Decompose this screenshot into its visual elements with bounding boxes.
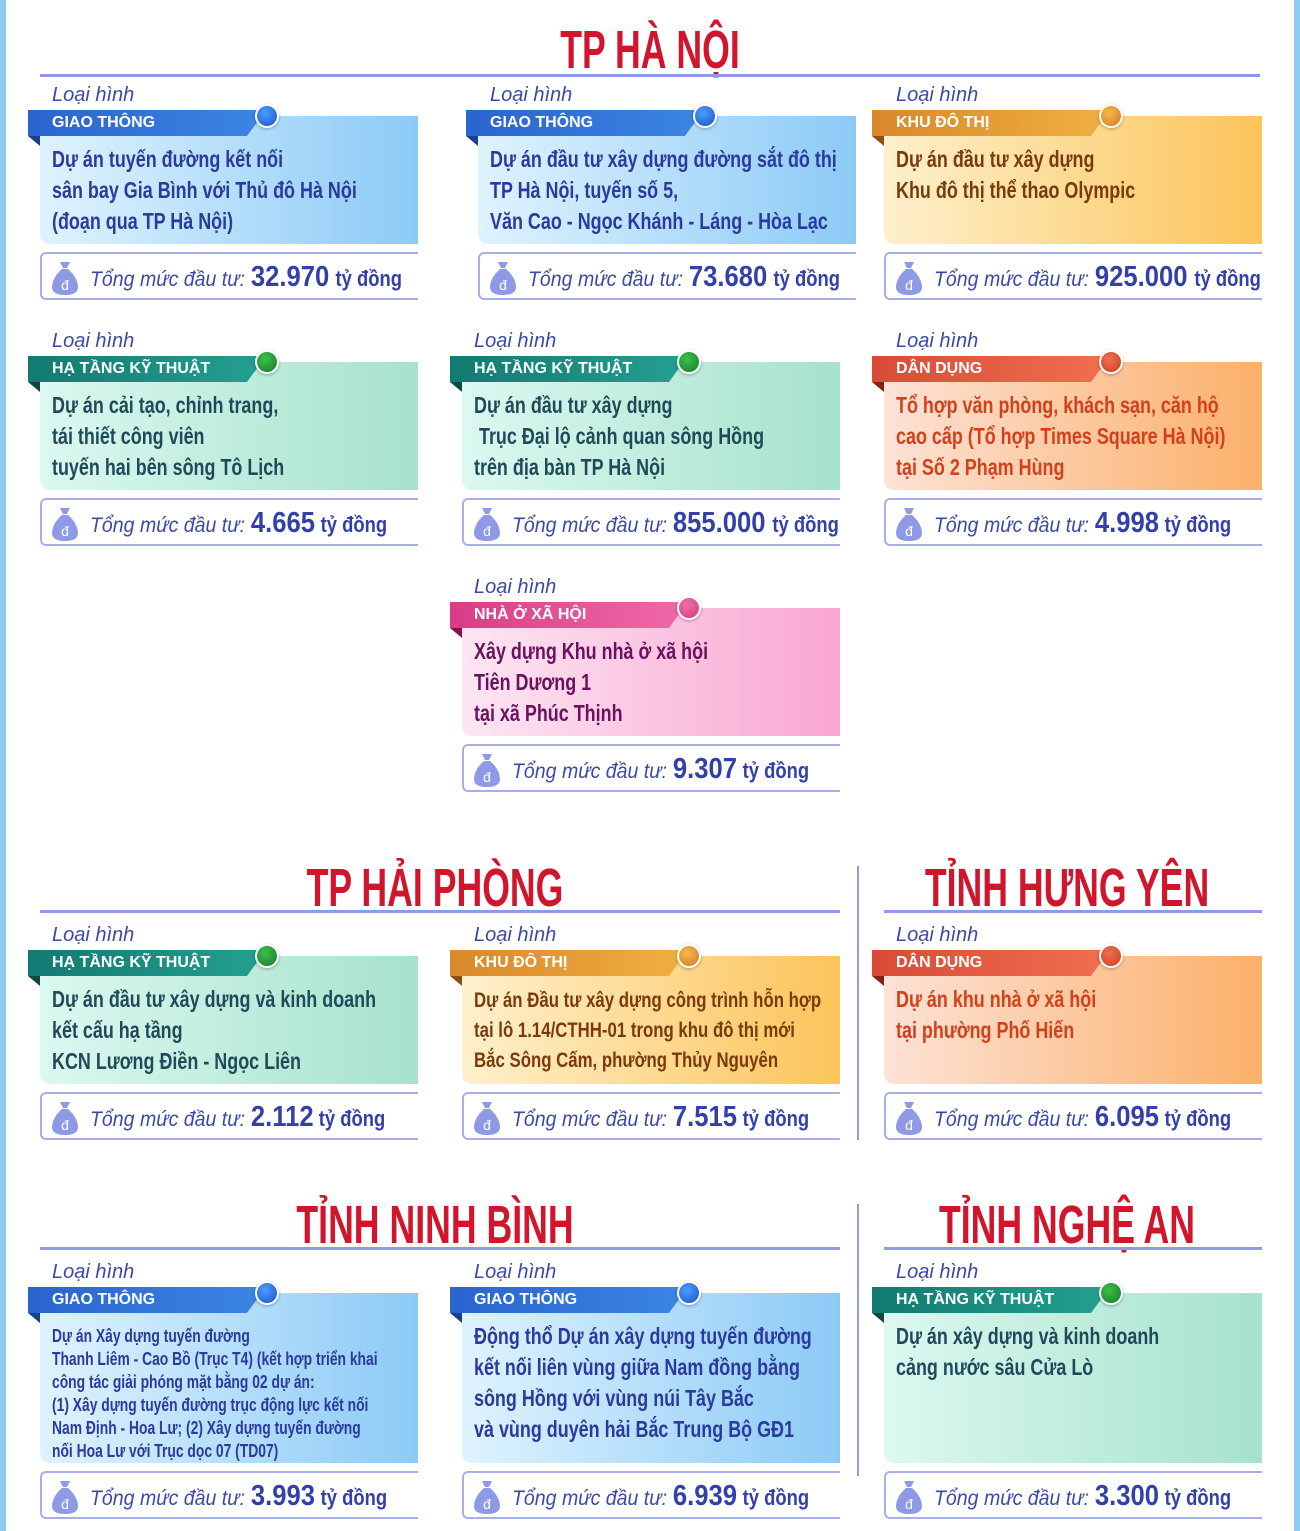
card: Hưng Yên dân dụng: 6.095 bbox=[1094, 1101, 1159, 1133]
card: Ninh Bình giao thông 1: GIAO THÔNG bbox=[52, 1291, 155, 1308]
card: Hà Nội giao thông 2: 73.680 bbox=[688, 261, 767, 293]
card: Hà Nội nhà ở xã hội bbox=[450, 576, 840, 792]
card: Hà Nội nhà ở xã hội: 9.307 bbox=[672, 753, 737, 785]
card: Hải Phòng khu đô thị: Loại hình bbox=[474, 924, 556, 946]
card: Hải Phòng hạ tầng: KCN Lương Điền - Ngọc Liên bbox=[52, 1048, 301, 1074]
card: Ninh Bình giao thông 2: Động thổ Dự án xây dựng tuyến đường bbox=[474, 1323, 812, 1349]
card: Hà Nội giao thông 2: Văn Cao - Ngọc Khánh - Láng - Hòa Lạc bbox=[490, 208, 828, 234]
card: Hà Nội hạ tầng 2: tỷ đồng bbox=[773, 512, 839, 537]
card: Hưng Yên dân dụng: Loại hình bbox=[896, 924, 978, 946]
card: Nghệ An hạ tầng: HẠ TẦNG KỸ THUẬT bbox=[896, 1291, 1054, 1308]
card: Hà Nội dân dụng bbox=[872, 330, 1262, 546]
card: Hải Phòng hạ tầng: kết cấu hạ tầng bbox=[52, 1017, 183, 1043]
card: Ninh Bình giao thông 1: tỷ đồng bbox=[321, 1485, 387, 1510]
title: Tỉnh Nghệ An: TỈNH NGHỆ AN bbox=[939, 1195, 1195, 1255]
card: Hà Nội hạ tầng 2: Tổng mức đầu tư: bbox=[512, 514, 667, 537]
card: Hà Nội giao thông 1: Loại hình bbox=[52, 84, 134, 106]
card: Hà Nội hạ tầng 1: HẠ TẦNG KỸ THUẬT bbox=[52, 360, 210, 377]
card: Hải Phòng hạ tầng: tỷ đồng bbox=[319, 1106, 386, 1131]
card: Hà Nội hạ tầng 2 bbox=[450, 330, 840, 546]
card: Hà Nội dân dụng: 4.998 bbox=[1094, 507, 1159, 539]
card: Hải Phòng khu đô thị: Bắc Sông Cấm, phường Thủy Nguyên bbox=[474, 1049, 778, 1072]
card: Hà Nội giao thông 2: GIAO THÔNG bbox=[490, 114, 593, 131]
card: Hà Nội hạ tầng 2: Trục Đại lộ cảnh quan sông Hồng bbox=[479, 423, 764, 449]
card: Hà Nội nhà ở xã hội: NHÀ Ở XÃ HỘI bbox=[474, 606, 586, 623]
card: Hà Nội giao thông 1: Dự án tuyến đường kết nối bbox=[52, 146, 283, 172]
card: Hà Nội giao thông 1: GIAO THÔNG bbox=[52, 114, 155, 131]
card: Hưng Yên dân dụng: Tổng mức đầu tư: bbox=[934, 1108, 1089, 1131]
card: Ninh Bình giao thông 2: sông Hồng với vùng núi Tây Bắc bbox=[474, 1385, 754, 1411]
card: Hà Nội giao thông 2 bbox=[466, 84, 856, 300]
card: Hà Nội khu đô thị: Khu đô thị thể thao Olympic bbox=[896, 177, 1135, 203]
card: Hà Nội dân dụng: Tổ hợp văn phòng, khách sạn, căn hộ bbox=[896, 392, 1219, 418]
card: Hà Nội giao thông 1 bbox=[28, 84, 418, 300]
card: Hà Nội hạ tầng 2: Loại hình bbox=[474, 330, 556, 352]
card: Hà Nội hạ tầng 1: tuyến hai bên sông Tô Lịch bbox=[52, 454, 284, 480]
card: Hải Phòng hạ tầng: Tổng mức đầu tư: bbox=[90, 1108, 245, 1131]
card: Hà Nội giao thông 1: tỷ đồng bbox=[336, 266, 402, 291]
card: Ninh Bình giao thông 1: Thanh Liêm - Cao Bồ (Trục T4) (kết hợp triển khai bbox=[52, 1349, 378, 1369]
card: Ninh Bình giao thông 1 bbox=[28, 1261, 418, 1519]
card: Hà Nội giao thông 2: Loại hình bbox=[490, 84, 572, 106]
card: Hải Phòng khu đô thị: tại lô 1.14/CTHH-01 trong khu đô thị mới bbox=[474, 1019, 795, 1042]
card: Hà Nội nhà ở xã hội: Tiên Dương 1 bbox=[474, 669, 591, 695]
card: Ninh Bình giao thông 2: tỷ đồng bbox=[743, 1485, 809, 1510]
card: Nghệ An hạ tầng: Dự án xây dựng và kinh doanh bbox=[896, 1323, 1159, 1349]
card: Hà Nội giao thông 1: 32.970 bbox=[250, 261, 329, 293]
card: Hải Phòng hạ tầng: Loại hình bbox=[52, 924, 134, 946]
card: Hải Phòng khu đô thị: Dự án Đầu tư xây dựng công trình hỗn hợp bbox=[474, 989, 821, 1012]
card: Nghệ An hạ tầng: Loại hình bbox=[896, 1261, 978, 1283]
card: Hà Nội hạ tầng 2: Dự án đầu tư xây dựng bbox=[474, 392, 672, 418]
card: Hà Nội giao thông 2: Dự án đầu tư xây dựng đường sắt đô thị bbox=[490, 146, 837, 172]
card: Ninh Bình giao thông 2: 6.939 bbox=[672, 1480, 737, 1512]
card: Ninh Bình giao thông 2: và vùng duyên hải Bắc Trung Bộ GĐ1 bbox=[474, 1416, 794, 1442]
card: Hà Nội khu đô thị bbox=[872, 84, 1262, 300]
card: Ninh Bình giao thông 1: Loại hình bbox=[52, 1261, 134, 1283]
card: Hà Nội giao thông 2: TP Hà Nội, tuyến số 5, bbox=[490, 177, 678, 203]
card: Hải Phòng khu đô thị: KHU ĐÔ THỊ bbox=[474, 954, 567, 971]
card: Ninh Bình giao thông 2: GIAO THÔNG bbox=[474, 1291, 577, 1308]
card: Ninh Bình giao thông 1: Tổng mức đầu tư: bbox=[90, 1487, 245, 1510]
card: Hải Phòng khu đô thị bbox=[450, 924, 840, 1140]
card: Hà Nội giao thông 2: tỷ đồng bbox=[774, 266, 840, 291]
card: Hải Phòng khu đô thị: Tổng mức đầu tư: bbox=[512, 1108, 667, 1131]
card: Hà Nội nhà ở xã hội: Xây dựng Khu nhà ở xã hội bbox=[474, 638, 708, 664]
card: Hà Nội khu đô thị: 925.000 bbox=[1094, 261, 1187, 293]
title: TP Hà Nội: TP HÀ NỘI bbox=[560, 20, 740, 80]
card: Hà Nội dân dụng: tỷ đồng bbox=[1165, 512, 1231, 537]
card: Hà Nội khu đô thị: Tổng mức đầu tư: bbox=[934, 268, 1089, 291]
card: Hải Phòng khu đô thị: 7.515 bbox=[672, 1101, 737, 1133]
card: Ninh Bình giao thông 2 bbox=[450, 1261, 840, 1519]
card: Ninh Bình giao thông 1: nối Hoa Lư với Trục dọc 07 (TD07) bbox=[52, 1441, 278, 1461]
card: Hải Phòng hạ tầng: Dự án đầu tư xây dựng và kinh doanh bbox=[52, 986, 376, 1012]
card: Hà Nội giao thông 2: Tổng mức đầu tư: bbox=[528, 268, 683, 291]
card: Hà Nội giao thông 1: Tổng mức đầu tư: bbox=[90, 268, 245, 291]
card: Hưng Yên dân dụng: DÂN DỤNG bbox=[896, 954, 982, 971]
card: Nghệ An hạ tầng: cảng nước sâu Cửa Lò bbox=[896, 1354, 1093, 1380]
card: Hưng Yên dân dụng: tỷ đồng bbox=[1165, 1106, 1231, 1131]
card: Hà Nội nhà ở xã hội: Loại hình bbox=[474, 576, 556, 598]
card: Hưng Yên dân dụng: tại phường Phố Hiến bbox=[896, 1017, 1074, 1043]
card: Hà Nội hạ tầng 1: tỷ đồng bbox=[321, 512, 387, 537]
card: Ninh Bình giao thông 2: kết nối liên vùng giữa Nam đồng bằng bbox=[474, 1354, 800, 1380]
card: Hà Nội nhà ở xã hội: tại xã Phúc Thịnh bbox=[474, 700, 623, 726]
card: Ninh Bình giao thông 1: (1) Xây dựng tuyến đường trục động lực kết nối bbox=[52, 1395, 368, 1415]
card: Nghệ An hạ tầng: 3.300 bbox=[1094, 1480, 1159, 1512]
title: Tỉnh Ninh Bình: TỈNH NINH BÌNH bbox=[296, 1195, 574, 1255]
card: Hà Nội hạ tầng 2: HẠ TẦNG KỸ THUẬT bbox=[474, 360, 632, 377]
title: TP Hải Phòng: TP HẢI PHÒNG bbox=[307, 858, 563, 918]
card: Hà Nội giao thông 1: (đoạn qua TP Hà Nội) bbox=[52, 208, 233, 234]
card: Hà Nội hạ tầng 1: tái thiết công viên bbox=[52, 423, 205, 449]
card: Hà Nội dân dụng: DÂN DỤNG bbox=[896, 360, 982, 377]
card: Hà Nội hạ tầng 1: Loại hình bbox=[52, 330, 134, 352]
card: Hà Nội hạ tầng 1 bbox=[28, 330, 418, 546]
card: Ninh Bình giao thông 1: 3.993 bbox=[250, 1480, 315, 1512]
card: Hà Nội nhà ở xã hội: tỷ đồng bbox=[743, 758, 809, 783]
card: Hà Nội khu đô thị: Loại hình bbox=[896, 84, 978, 106]
card: Hải Phòng hạ tầng: 2.112 bbox=[250, 1101, 313, 1133]
card: Ninh Bình giao thông 1: Nam Định - Hoa Lư; (2) Xây dựng tuyến đường bbox=[52, 1418, 361, 1438]
title: Tỉnh Hưng Yên: TỈNH HƯNG YÊN bbox=[925, 858, 1209, 918]
card: Hà Nội hạ tầng 1: 4.665 bbox=[250, 507, 315, 539]
card: Hải Phòng hạ tầng: HẠ TẦNG KỸ THUẬT bbox=[52, 954, 210, 971]
card: Hà Nội dân dụng: cao cấp (Tổ hợp Times Square Hà Nội) bbox=[896, 423, 1225, 449]
card: Hưng Yên dân dụng bbox=[872, 924, 1262, 1140]
card: Hà Nội dân dụng: Tổng mức đầu tư: bbox=[934, 514, 1089, 537]
card: Hà Nội hạ tầng 1: Dự án cải tạo, chỉnh trang, bbox=[52, 392, 278, 418]
card: Ninh Bình giao thông 2: Loại hình bbox=[474, 1261, 556, 1283]
card: Hà Nội hạ tầng 1: Tổng mức đầu tư: bbox=[90, 514, 245, 537]
card: Hà Nội khu đô thị: KHU ĐÔ THỊ bbox=[896, 114, 989, 131]
card: Hà Nội khu đô thị: tỷ đồng bbox=[1195, 266, 1261, 291]
card: Nghệ An hạ tầng: Tổng mức đầu tư: bbox=[934, 1487, 1089, 1510]
card: Hải Phòng khu đô thị: tỷ đồng bbox=[743, 1106, 809, 1131]
card: Hà Nội hạ tầng 2: 855.000 bbox=[672, 507, 765, 539]
card: Hà Nội dân dụng: Loại hình bbox=[896, 330, 978, 352]
card: Hà Nội khu đô thị: Dự án đầu tư xây dựng bbox=[896, 146, 1094, 172]
card: Ninh Bình giao thông 2: Tổng mức đầu tư: bbox=[512, 1487, 667, 1510]
card: Ninh Bình giao thông 1: công tác giải phóng mặt bằng 02 dự án: bbox=[52, 1372, 315, 1392]
card: Ninh Bình giao thông 1: Dự án Xây dựng tuyến đường bbox=[52, 1326, 250, 1346]
card: Hà Nội dân dụng: tại Số 2 Phạm Hùng bbox=[896, 454, 1064, 480]
card: Nghệ An hạ tầng: tỷ đồng bbox=[1165, 1485, 1231, 1510]
card: Hà Nội hạ tầng 2: trên địa bàn TP Hà Nội bbox=[474, 454, 665, 480]
card: Hà Nội nhà ở xã hội: Tổng mức đầu tư: bbox=[512, 760, 667, 783]
card: Hà Nội giao thông 1: sân bay Gia Bình với Thủ đô Hà Nội bbox=[52, 177, 357, 203]
card: Hưng Yên dân dụng: Dự án khu nhà ở xã hội bbox=[896, 986, 1096, 1012]
card: Hải Phòng hạ tầng bbox=[28, 924, 418, 1140]
card: Nghệ An hạ tầng bbox=[872, 1261, 1262, 1519]
